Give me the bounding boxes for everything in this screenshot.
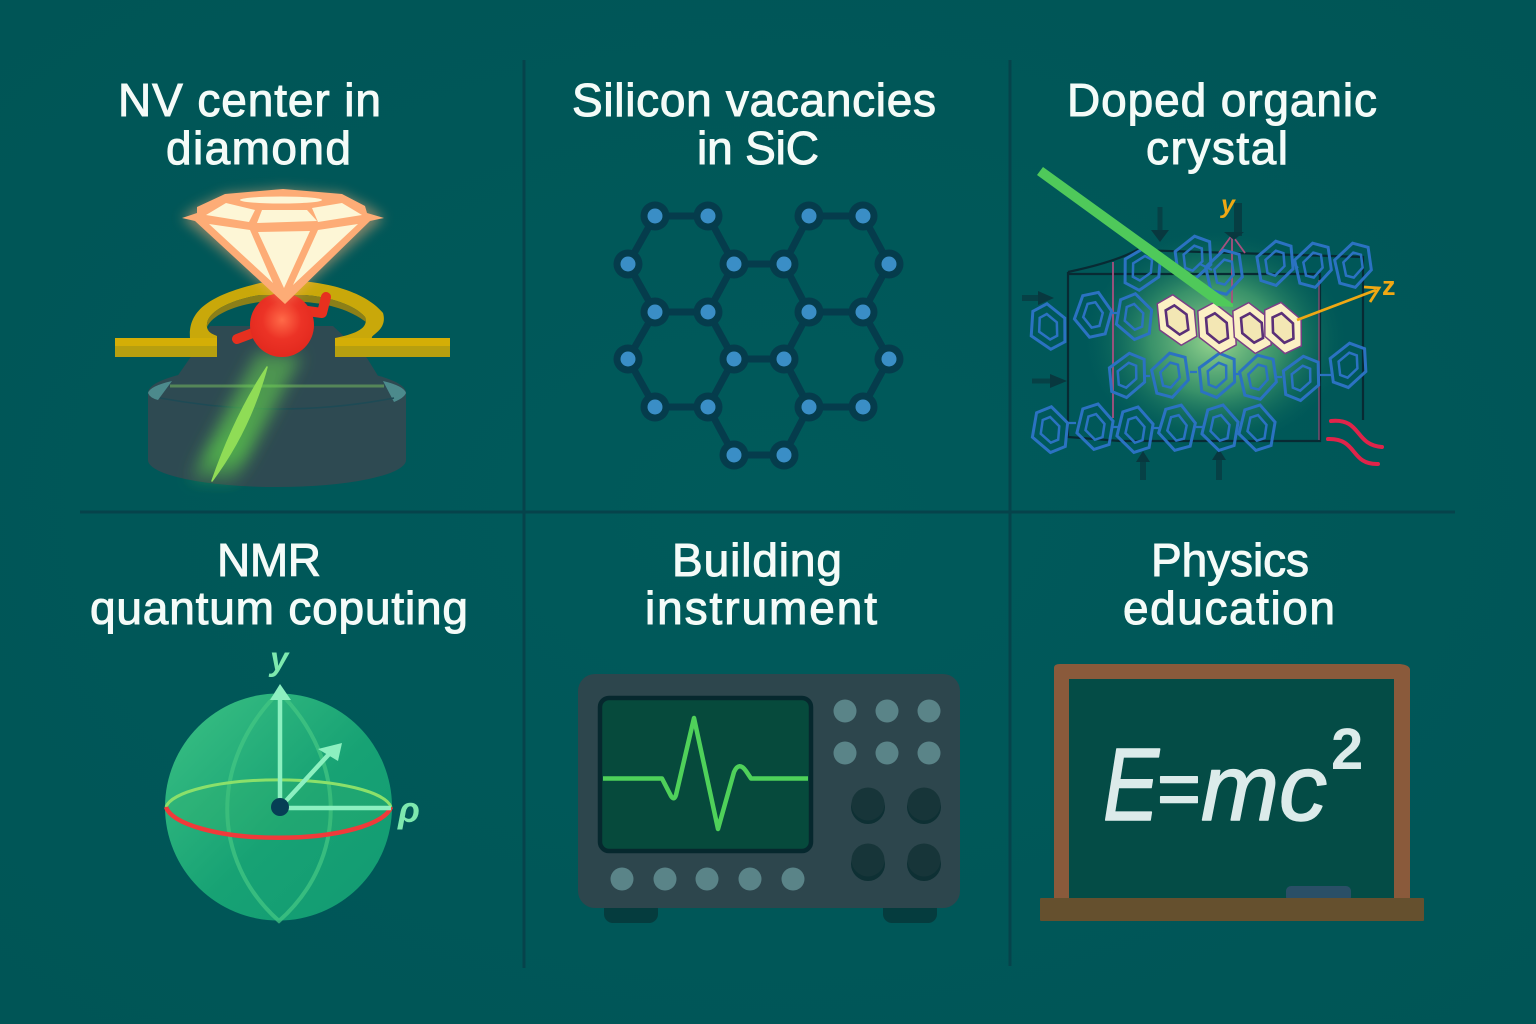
panel: Physics education: [1040, 534, 1424, 921]
Bloch sphere: [165, 684, 392, 921]
heading: Silicon vacancies in SiC: [572, 74, 936, 174]
heading: NMR quantum coputing: [90, 534, 468, 634]
axis arrow z and label: z: [1382, 271, 1396, 301]
heading: NMR quantum coputing: quantum coputing: [90, 582, 468, 634]
heading: Building instrument: [645, 534, 877, 634]
green excitation beam: [1037, 167, 1233, 307]
equation: m: [1201, 735, 1279, 840]
equation: =: [1157, 744, 1201, 833]
axis arrow z and label: [1297, 271, 1396, 320]
heading: Doped organic crystal: Doped organic: [1067, 74, 1377, 126]
heading: Doped organic crystal: crystal: [1146, 122, 1288, 174]
icon: red NV spin ball: [237, 293, 326, 357]
heading: NMR quantum coputing: NMR: [217, 534, 321, 586]
equation: [1103, 717, 1363, 842]
heading: Physics education: Physics: [1151, 534, 1309, 586]
grid dividers: [80, 60, 1455, 968]
heading: Physics education: [1123, 534, 1335, 634]
panel: Silicon vacancies in SiC: [572, 74, 936, 470]
grey buttons: [610, 700, 940, 890]
axis label y: y: [1219, 191, 1236, 219]
heading: Silicon vacancies in SiC: in SiC: [697, 122, 819, 174]
crystal box: [1068, 250, 1363, 441]
equation: E: [1103, 727, 1160, 842]
eraser: [1286, 886, 1351, 902]
icon: pedestal: [148, 326, 406, 487]
crystal glow: [1085, 232, 1345, 448]
label rho: ρ: [397, 789, 420, 830]
panel: Building instrument: [578, 534, 960, 923]
heading: Building instrument: instrument: [645, 582, 877, 634]
blue host molecules: [1021, 232, 1377, 457]
panel: NMR quantum computing: [90, 534, 468, 921]
heading: NV center in diamond: [118, 74, 381, 174]
blackboard: [1040, 664, 1424, 921]
oscilloscope screen: [600, 698, 811, 851]
board frame: [1054, 664, 1410, 900]
icon: glowing diamond: [182, 189, 384, 304]
equation: c: [1279, 735, 1327, 840]
dark knobs: [851, 788, 941, 881]
hexagonal lattice: [614, 202, 904, 470]
icon: green laser beam: [190, 352, 302, 482]
heading: Silicon vacancies in SiC: Silicon vacancies: [572, 74, 936, 126]
board surface: [1069, 679, 1394, 900]
heading: Doped organic crystal: [1067, 74, 1377, 174]
icon: omega microwave loop: [115, 281, 450, 357]
red squiggles: [1328, 421, 1382, 464]
yellow dopant molecules: [1148, 289, 1311, 359]
pink axis lines: [1113, 235, 1319, 440]
heading: Building instrument: Building: [672, 534, 842, 586]
panel: Doped organic crystal: [1021, 74, 1396, 480]
oscilloscope: [578, 674, 960, 923]
heading: Physics education: education: [1123, 582, 1335, 634]
chalk tray: [1040, 898, 1424, 921]
heading: NV center in diamond: diamond: [166, 122, 351, 174]
dark stress arrows: [1022, 203, 1244, 480]
heading: NV center in diamond: NV center in: [118, 74, 381, 126]
label y: y: [268, 640, 290, 677]
equation: 2: [1331, 717, 1363, 782]
waveform trace: [603, 718, 808, 829]
panel: NV center in diamond: [115, 74, 450, 487]
